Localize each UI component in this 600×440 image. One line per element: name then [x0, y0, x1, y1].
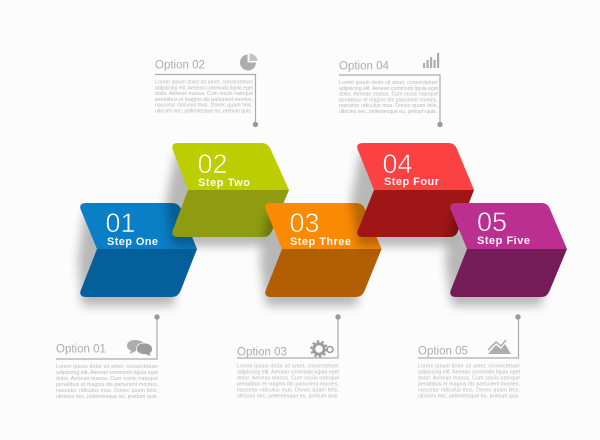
- text block: adipiscing elit. Aenean commodo ligula eget: [155, 85, 254, 91]
- panel: option 02: [155, 53, 258, 127]
- text block: penatibus et magnis dis parturient montes,: [418, 382, 520, 388]
- number: 03: [290, 208, 320, 238]
- shadow: [445, 212, 543, 306]
- text block: dolor. Aenean massa. Cum sociis natoque: [339, 92, 438, 98]
- panel: option 03: [237, 314, 341, 400]
- label: Step Four: [384, 176, 440, 188]
- upper face: [80, 203, 197, 249]
- label: Step Five: [477, 235, 530, 247]
- text block: ultricies nec, pellentesque eu, pretium quis.: [56, 394, 158, 400]
- text block: nascetur ridiculus mus. Donec quam felis,: [237, 388, 339, 394]
- connector dot: [154, 314, 160, 320]
- shadow: [351, 152, 452, 246]
- icon: speech bubbles: [127, 340, 152, 357]
- step 5: purple arrow: [445, 203, 567, 306]
- number: 05: [477, 207, 507, 237]
- text block: nascetur ridiculus mus. Donec quam felis,: [56, 388, 158, 394]
- text block: Lorem ipsum dolor sit amet, consectetuer: [339, 80, 438, 86]
- step 2: olive arrow: [166, 143, 289, 246]
- lower face: [172, 190, 289, 237]
- panel: option 01: [56, 314, 160, 400]
- text block: nascetur ridiculus mus. Donec quam felis,: [155, 103, 253, 109]
- text block: nascetur ridiculus mus. Donec quam felis,: [339, 103, 438, 109]
- text block: dolor. Aenean massa. Cum sociis natoque: [155, 91, 253, 97]
- text block: [237, 364, 340, 400]
- connector line: [237, 317, 338, 358]
- step 4: red arrow: [351, 143, 474, 246]
- text block: adipiscing elit. Aenean commodo ligula eget: [339, 86, 439, 92]
- upper face: [172, 143, 289, 190]
- connector dot: [335, 314, 341, 320]
- step 1: blue arrow: [78, 203, 197, 306]
- upper face: [450, 203, 567, 249]
- label: Step One: [107, 236, 158, 248]
- label: Step Two: [198, 177, 250, 189]
- lower face: [357, 190, 474, 237]
- text block: dolor. Aenean massa. Cum sociis natoque: [418, 376, 520, 382]
- connector dot: [253, 122, 258, 127]
- heading: option 03: Option 03: [237, 346, 287, 358]
- connector line: [56, 317, 157, 359]
- lower face: [265, 249, 382, 297]
- panel: option 04: [339, 53, 443, 127]
- icon: bar chart: [423, 53, 439, 68]
- connector dot: [515, 314, 521, 320]
- label: Step Three: [290, 236, 351, 248]
- heading: option 02: Option 02: [155, 60, 205, 72]
- text block: [155, 80, 254, 114]
- text block: adipiscing elit. Aenean commodo ligula eget: [56, 370, 159, 376]
- lower face: [450, 249, 567, 297]
- upper face: [357, 143, 474, 190]
- text block: Lorem ipsum dolor sit amet, consectetuer: [237, 364, 339, 370]
- connector line: [155, 74, 256, 124]
- icon: mountains and trend line: [488, 340, 511, 354]
- text block: dolor. Aenean massa. Cum sociis natoque: [237, 376, 339, 382]
- text block: Lorem ipsum dolor sit amet, consectetuer: [155, 80, 253, 86]
- panel: option 05: [418, 314, 521, 400]
- text block: penatibus et magnis dis parturient montes,: [155, 97, 253, 103]
- text block: adipiscing elit. Aenean commodo ligula eget: [237, 370, 340, 376]
- text block: [418, 364, 521, 400]
- icon: gears: [311, 341, 333, 357]
- text block: [56, 364, 159, 400]
- text block: nascetur ridiculus mus. Donec quam felis,: [418, 388, 520, 394]
- number: 01: [106, 208, 136, 238]
- heading: option 04: Option 04: [339, 60, 389, 72]
- text block: ultricies nec, pellentesque eu, pretium quis.: [418, 394, 520, 400]
- connector line: [339, 75, 440, 124]
- number: 04: [382, 149, 413, 179]
- upper face: [265, 203, 382, 249]
- text block: Lorem ipsum dolor sit amet, consectetuer: [56, 364, 158, 370]
- icon: pie chart: [240, 53, 258, 70]
- shadow: [78, 212, 175, 306]
- text block: adipiscing elit. Aenean commodo ligula eget: [418, 370, 521, 376]
- connector line: [418, 317, 518, 358]
- step 3: orange arrow: [260, 203, 382, 306]
- text block: ultricies nec, pellentesque eu, pretium quis.: [155, 108, 252, 114]
- text block: [339, 80, 439, 115]
- connector dot: [437, 122, 443, 127]
- text block: Lorem ipsum dolor sit amet, consectetuer: [418, 364, 520, 370]
- shadow: [166, 152, 266, 246]
- heading: option 05: Option 05: [418, 346, 468, 358]
- text block: penatibus et magnis dis parturient montes,: [237, 382, 339, 388]
- heading: option 01: Option 01: [56, 344, 106, 356]
- text block: ultricies nec, pellentesque eu, pretium quis.: [237, 394, 339, 400]
- text block: dolor. Aenean massa. Cum sociis natoque: [56, 376, 158, 382]
- text block: penatibus et magnis dis parturient montes,: [56, 382, 158, 388]
- lower face: [80, 249, 197, 297]
- shadow: [260, 212, 358, 306]
- text block: penatibus et magnis dis parturient montes,: [339, 97, 438, 103]
- text block: ultricies nec, pellentesque eu, pretium quis.: [339, 109, 437, 115]
- number: 02: [198, 149, 228, 179]
